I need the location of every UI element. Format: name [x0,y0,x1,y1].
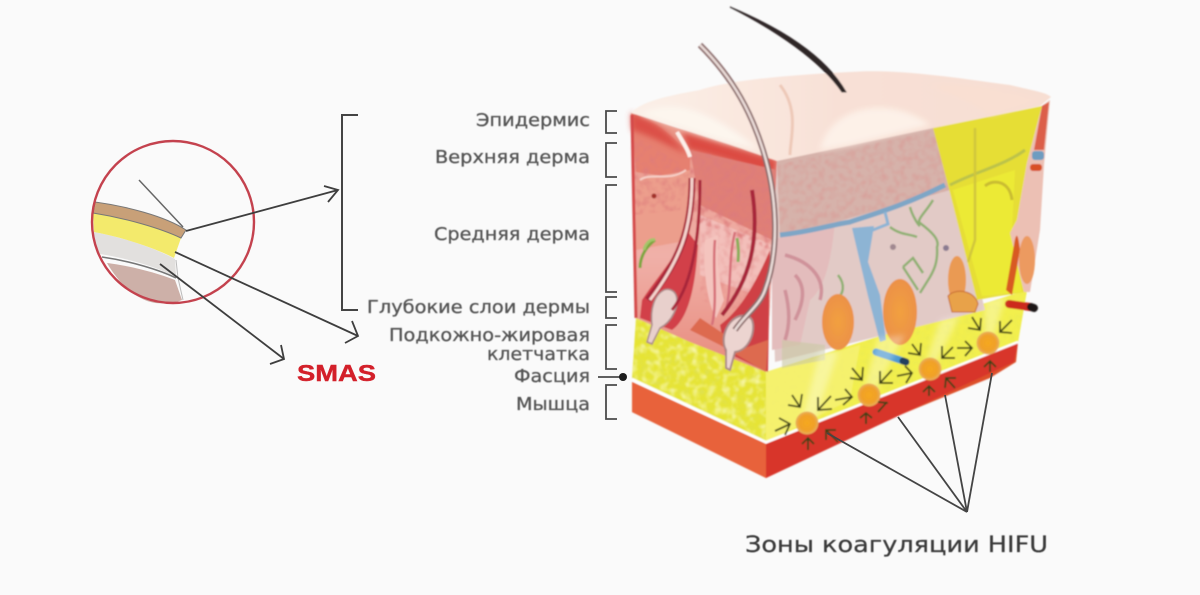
label: middle dermis: Средняя дерма [434,224,590,245]
label: epidermis: Эпидермис [476,110,590,131]
layer brackets [598,111,622,419]
leader lines to HIFU zones [827,373,992,512]
red tube [1009,304,1034,308]
coagulation zones [796,332,1000,434]
blue and green blood vessels [780,185,945,342]
yellow band [93,213,181,258]
label: subcutaneous fat line two: клетчатка [487,344,590,365]
arrow to SMAS [160,264,284,364]
skin cross-section illustration [631,7,1051,478]
subcutaneous fat layer [632,290,1027,442]
hair line in circle [139,180,183,227]
label: muscle: Мышца [516,394,590,415]
caption: HIFU zones: Зоны коагуляции HIFU [745,533,1048,558]
big bracket [342,115,358,310]
blue tube [876,352,906,362]
label: subcutaneous fat: Подкожно-жировая [389,325,590,346]
grey band [94,232,176,277]
label: deep dermis: Глубокие слои дермы [367,297,590,318]
SMAS label: SMAS [297,360,376,386]
hair shaft: dark upper [730,7,846,92]
hair follicles [647,178,753,370]
hair shaft: long curved [700,45,775,330]
fascia dot [619,373,627,381]
skin surface: top [631,71,1051,161]
arrow to fat label [175,252,358,343]
left face: dermis [631,113,786,372]
ultrasound beam: yellow [933,106,1042,300]
muscle layer [632,342,1018,478]
brown band [93,202,186,238]
label: upper dermis: Верхняя дерма [435,147,590,168]
focused beams [802,296,1005,420]
layer labels [367,110,590,415]
magnified skin circle [92,141,254,303]
right edge: vessels [1006,100,1050,295]
fat lobules: orange bulbs [822,244,978,350]
arrow to dermis bracket [186,186,338,231]
taupe muscle band [107,263,182,303]
energy arrows [775,317,1012,450]
right face: translucent dermis [772,124,985,368]
label: fascia: Фасция [514,366,590,387]
